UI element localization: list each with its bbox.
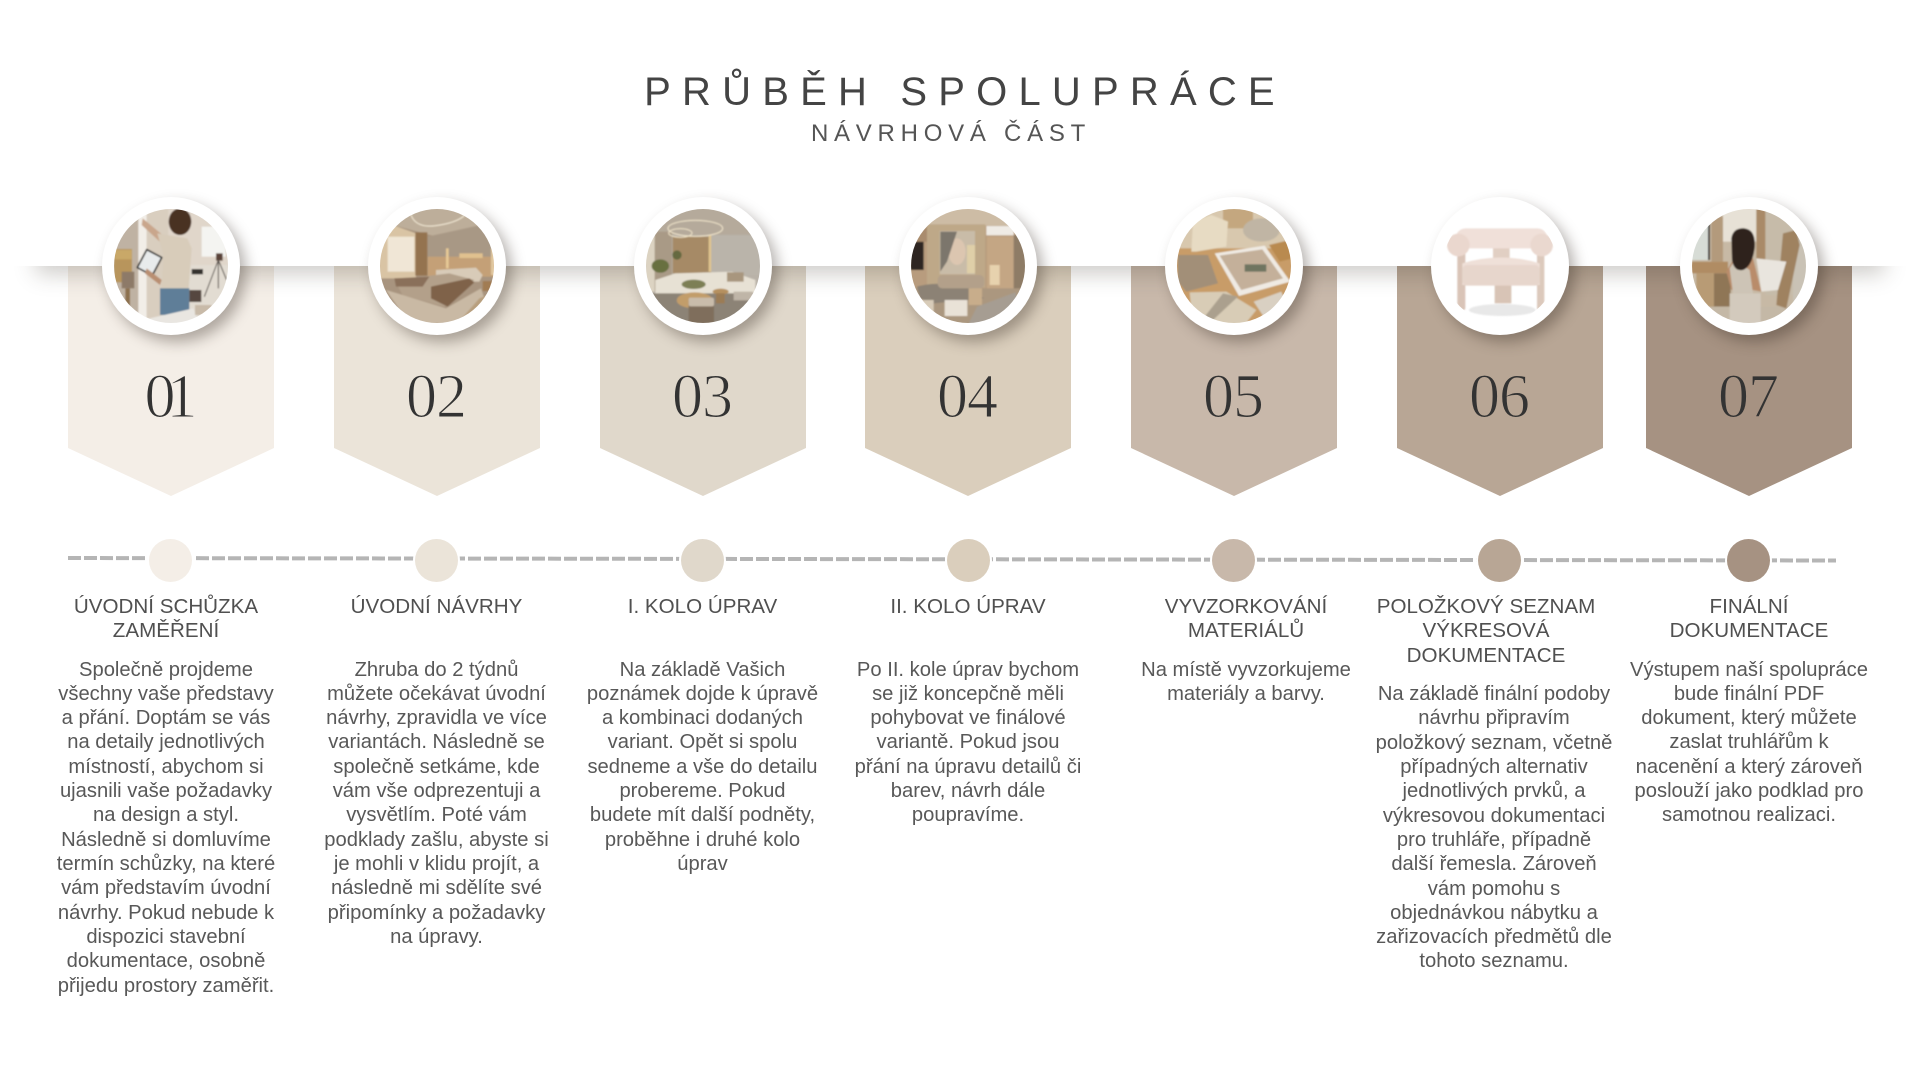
text: step 07: bude finální PDF <box>1674 683 1824 705</box>
heading: step 05: VYVZORKOVÁNÍ <box>1165 594 1327 618</box>
heading: step 04: II. KOLO ÚPRAV <box>890 594 1046 618</box>
text: step 06 <box>1376 683 1612 972</box>
timeline node 06 <box>1478 539 1521 582</box>
subtitle: NÁVRHOVÁ ČÁST <box>811 120 1091 146</box>
heading: step 06: VÝKRESOVÁ <box>1422 619 1550 642</box>
text: step 01: Společně projdeme <box>79 658 253 680</box>
heading: step 01: ZAMĚŘENÍ <box>113 619 219 642</box>
text: step 02: variantách. Následně se <box>328 731 545 753</box>
icon: photo 03 living room <box>634 197 772 335</box>
text: step 04: poupravíme. <box>912 804 1024 826</box>
text: step 06: tohoto seznamu. <box>1419 950 1569 972</box>
text: step 07: nacenění a který zároveň <box>1636 756 1862 778</box>
panel: step 02 chevron: 02 <box>406 363 466 431</box>
panel: step 05 chevron <box>1131 266 1337 496</box>
icon: photo 04 room with portrait artwork <box>899 197 1037 335</box>
panel: step 06 chevron <box>1397 266 1603 496</box>
text: step 07: dokument, který můžete <box>1641 707 1857 729</box>
text: step 04: barev, návrh dále <box>891 780 1045 802</box>
text: step 04: variantě. Pokud jsou <box>877 731 1059 753</box>
text: step 05: Na místě vyvzorkujeme <box>1141 658 1351 680</box>
panel: step 03 chevron: 03 <box>672 363 732 431</box>
timeline node 07 <box>1727 539 1770 582</box>
timeline node 03 <box>681 539 724 582</box>
text: step 06: objednávkou nábytku a <box>1390 902 1598 924</box>
panel: step 07 chevron <box>1646 266 1852 496</box>
text: step 03: budete mít další podněty, <box>590 804 815 826</box>
text: step 02 <box>324 658 549 948</box>
panel: step 06 chevron: 06 <box>1469 363 1529 431</box>
text: step 01: dokumentace, osobně <box>67 950 265 972</box>
timeline node 04 <box>946 539 990 582</box>
heading: step 01: ÚVODNÍ SCHŮZKA <box>74 594 258 618</box>
timeline node 01 <box>149 539 192 582</box>
text: step 02: podklady zašlu, abyste si <box>324 829 549 851</box>
text: step 06: položkový seznam, včetně <box>1376 732 1612 754</box>
text: step 02: vysvětlím. Poté vám <box>346 804 527 826</box>
text: step 01: na detaily jednotlivých <box>67 731 265 753</box>
text: step 01 <box>57 658 275 997</box>
text: step 04 <box>855 658 1081 826</box>
text: step 04: přání na úpravu detailů či <box>855 756 1081 778</box>
icon: photo 02 bedroom <box>368 197 506 335</box>
text: step 01: ujasnili vaše požadavky <box>60 780 272 802</box>
text: step 03: probereme. Pokud <box>619 780 786 802</box>
panel: step 04 chevron <box>865 266 1071 496</box>
text: step 06: pro truhláře, případně <box>1397 829 1591 851</box>
text: step 06: zařizovacích předmětů dle <box>1376 926 1612 948</box>
text: step 06: další řemesla. Zároveň <box>1391 853 1597 875</box>
heading: step 02: ÚVODNÍ NÁVRHY <box>351 594 522 618</box>
text: step 03: proběhne i druhé kolo <box>605 829 800 851</box>
text: step 06: Na základě finální podoby <box>1378 683 1610 705</box>
text: step 01: přijedu prostory zaměřit. <box>58 975 274 997</box>
text: step 02: vám vše odprezentuji a <box>333 780 540 802</box>
text: step 01: všechny vaše představy <box>58 683 274 705</box>
text: step 06: výkresovou dokumentaci <box>1383 805 1605 827</box>
icon: photo 07 woman reading plans <box>1680 197 1818 335</box>
text: step 05: materiály a barvy. <box>1167 683 1325 705</box>
icon: photo 05 material samples <box>1165 197 1303 335</box>
text: step 07: poslouží jako podklad pro <box>1635 780 1863 802</box>
text: step 01: termín schůzky, na které <box>57 853 275 875</box>
panel: step 07 chevron: 07 <box>1718 363 1778 431</box>
heading: step 03: I. KOLO ÚPRAV <box>628 594 777 618</box>
heading: step 01 <box>74 594 258 642</box>
text: step 03: Na základě Vašich <box>620 658 785 680</box>
heading: step 05: MATERIÁLŮ <box>1188 619 1304 642</box>
text: step 02: na úpravy. <box>390 926 483 948</box>
text: step 07: zaslat truhlářům k <box>1669 731 1829 753</box>
text: step 07: samotnou realizaci. <box>1662 804 1836 826</box>
text: step 03: a kombinaci dodaných <box>602 707 803 729</box>
text: step 03: sedneme a vše do detailu <box>587 756 818 778</box>
text: step 05 <box>1141 658 1351 705</box>
text: step 06: jednotlivých prvků, a <box>1403 780 1585 802</box>
text: step 02: je mohli v klidu projít, a <box>334 853 539 875</box>
text: step 01: Následně si domluvíme <box>61 829 271 851</box>
panel: step 04 chevron: 04 <box>937 363 997 431</box>
heading: step 05 <box>1164 594 1328 642</box>
text: step 02: Zhruba do 2 týdnů <box>355 658 518 680</box>
icon: photo 06 armchair <box>1431 197 1569 335</box>
panel: step 01 chevron <box>68 266 274 496</box>
text: step 04: pohybovat ve finálové <box>870 707 1066 729</box>
text: step 01: vám představím úvodní <box>61 877 271 899</box>
text: step 06: vám pomohu s <box>1428 878 1560 900</box>
text: step 06: případných alternativ <box>1400 756 1588 778</box>
panel: step 05 chevron: 05 <box>1203 363 1263 431</box>
text: step 02: připomínky a požadavky <box>328 902 545 924</box>
heading: step 07: FINÁLNÍ <box>1710 594 1788 618</box>
text: step 04: Po II. kole úprav bychom <box>857 658 1079 680</box>
text: step 06: návrhu připravím <box>1418 707 1570 729</box>
heading: step 07 <box>1670 594 1828 642</box>
text: step 02: návrhy, zpravidla ve více <box>326 707 547 729</box>
panel: step 01 chevron: 01 <box>144 363 188 431</box>
timeline node 02 <box>415 539 458 582</box>
timeline node 05 <box>1212 539 1255 582</box>
horizontal band shadow <box>27 266 1893 285</box>
text: step 03: variant. Opět si spolu <box>608 731 797 753</box>
text: step 07 <box>1630 658 1868 826</box>
text: step 01: a přání. Doptám se vás <box>62 707 270 729</box>
dashed timeline connector <box>68 556 1836 562</box>
text: step 01: na design a styl. <box>93 804 239 826</box>
heading: step 06 <box>1377 594 1595 667</box>
text: step 01: místností, abychom si <box>68 756 264 778</box>
heading: step 07: DOKUMENTACE <box>1670 619 1828 642</box>
text: step 01: návrhy. Pokud nebude k <box>58 902 274 924</box>
text: step 03: úprav <box>677 853 728 875</box>
text: step 03 <box>587 658 818 875</box>
text: step 02: společně setkáme, kde <box>333 756 540 778</box>
title: PRŮBĚH SPOLUPRÁCE <box>644 70 1286 114</box>
panel: step 02 chevron <box>334 266 540 496</box>
panel: step 03 chevron <box>600 266 806 496</box>
heading: step 06: POLOŽKOVÝ SEZNAM <box>1377 594 1595 618</box>
text: step 01: dispozici stavební <box>86 926 246 948</box>
icon: photo 01 woman measuring room <box>102 197 240 335</box>
text: step 04: se již koncepčně měli <box>872 683 1064 705</box>
heading: step 06: DOKUMENTACE <box>1407 644 1565 667</box>
text: step 03: poznámek dojde k úpravě <box>587 683 818 705</box>
text: step 02: následně mi sdělíte své <box>331 877 542 899</box>
text: step 07: Výstupem naší spolupráce <box>1630 658 1868 680</box>
text: step 02: můžete očekávat úvodní <box>327 683 546 705</box>
